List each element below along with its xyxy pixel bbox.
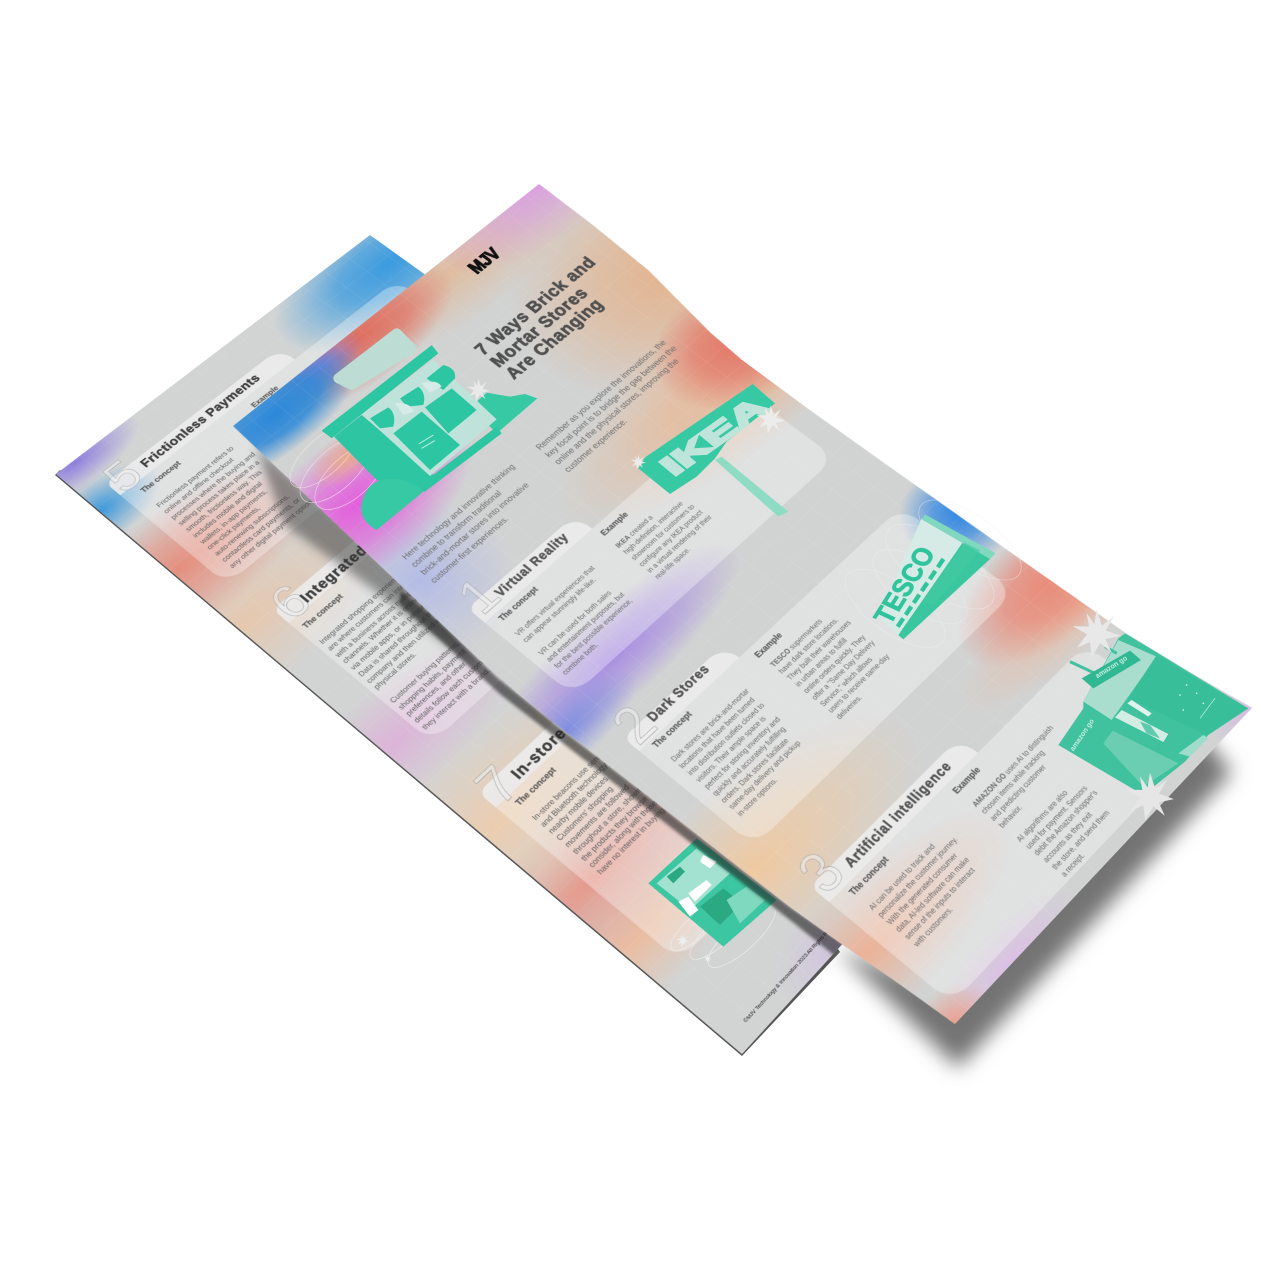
text: tesco example: have dark store locations. — [777, 616, 841, 676]
panel: frictionless payments: The concept — [139, 460, 183, 494]
panel: artificial intelligence: 3 — [784, 840, 857, 904]
text: dark stores concept: orders. Dark stores facilitate — [719, 737, 791, 805]
text: in-store concept: the products they browse or — [579, 788, 656, 863]
text: tesco example: users to receive same-day — [827, 653, 892, 715]
text: frictionless concept: wallets, in-app payments, — [199, 488, 269, 545]
text: integrated concept: physical stores. — [373, 651, 419, 691]
intro text left: combine to transform traditional — [409, 489, 504, 569]
intro text left: Here technology and innovative thinking — [400, 463, 517, 561]
text: dark stores concept: same-day delivery and pickup — [727, 740, 803, 812]
text: dark stores concept: into distribution outlets closed to — [686, 701, 767, 777]
panel: integrated shopping: 6 — [258, 575, 323, 629]
text: integrated concept: with a business across multiple — [334, 586, 418, 659]
panel: artificial intelligence: The concept — [847, 855, 891, 898]
panel: dark stores — [599, 514, 1006, 838]
text: integrated concept: Integrated shopping experiences — [318, 570, 407, 646]
panel: dark stores: 2 — [599, 695, 669, 755]
text: amazon example: AMAZON GO uses AI to distinguish — [971, 724, 1056, 809]
logo: MJV — [463, 245, 505, 277]
back sheet page — [56, 235, 1046, 1054]
heading: in-store beacons: In-store beacons — [508, 673, 625, 782]
text: amazon example: chosen items while tracking — [979, 749, 1047, 816]
text: dark stores concept: perfect for storing inventory and — [702, 715, 782, 791]
panel: in-store beacons — [462, 673, 756, 952]
text: tesco example: online orders quickly. They — [802, 634, 868, 695]
panel: frictionless payments — [92, 286, 408, 577]
intro text right: key focal point is to bridge the gap between the — [543, 344, 679, 459]
text: tesco example: Service," which allows — [818, 655, 875, 708]
text: vr concept: can appear stunningly life-like. — [521, 577, 598, 644]
text: integrated concept: are where customers can interact — [326, 575, 416, 652]
text: amazon example: and predicting customer — [988, 763, 1048, 823]
text: amazon example: behavior. — [997, 803, 1025, 830]
text: frictionless concept: smooth, frictionless way. This — [184, 469, 264, 533]
intro text left: brick-and-mortar stores into innovative — [419, 481, 531, 577]
panel: frictionless payments: 5 — [92, 451, 154, 501]
text: ikea example: IKEA created a — [614, 514, 655, 550]
photo: in-store beacons — [648, 838, 783, 976]
text: in-store concept: Customers' shopping — [555, 785, 615, 843]
heading: integrated shopping: Integrated Shopping — [297, 492, 431, 605]
text: frictionless concept: any other digital payment option. — [228, 498, 316, 570]
heading: virtual reality: Virtual Reality — [491, 530, 572, 599]
illustration: storefront — [280, 333, 537, 530]
text: integrated concept: Data is shared throughout the — [357, 607, 438, 678]
text: vr concept: VR can be used for both sales — [537, 589, 614, 657]
text: vr concept: and entertainment purposes, but — [545, 591, 626, 664]
text: frictionless concept: Frictionless payment refers to — [155, 445, 236, 509]
text: ai concept: with customers. — [912, 905, 955, 949]
text: tesco example: TESCO supermarkets — [769, 618, 825, 669]
illustration: Amazon Go store: amazon go — [1094, 654, 1130, 680]
text: frictionless concept: selling process takes place in a — [177, 460, 261, 527]
illustration: TESCO building: TESCO — [867, 542, 942, 628]
text: amazon example: AI algorithms are also — [1015, 789, 1070, 844]
text: integrated concept: shopping habits, payment — [397, 648, 468, 711]
text: vr concept: for the best possible experience, — [552, 597, 634, 670]
panel: in-store beacons: The concept — [514, 766, 558, 808]
text: ikea example: in a virtual rendering of their — [645, 514, 714, 574]
text: ikea example: high-definition, interactive — [622, 500, 685, 556]
text: ai concept: data, AI-led software can make — [894, 856, 972, 934]
text: integrated concept — [318, 570, 492, 731]
title: Are Changing — [500, 295, 608, 383]
text: tesco example: deliveries. — [835, 694, 865, 721]
text: tesco example — [769, 616, 892, 721]
text: frictionless concept: contactless card payments, or — [221, 497, 302, 564]
intro text right: online and the physical stores, improving the — [552, 357, 681, 466]
heading: frictionless payments: Frictionless Payments — [138, 372, 263, 470]
text: dark stores concept: in-store options. — [736, 777, 780, 818]
panel: virtual reality: The concept — [497, 585, 540, 623]
text: ai concept: personalize the customer journey. — [876, 835, 960, 920]
text: tesco example: They built their warehouses — [785, 619, 853, 682]
text: ikea example: configure any IKEA product — [637, 509, 705, 568]
text: frictionless concept: processes where the buying and — [170, 451, 257, 521]
text: dark stores concept: Dark stores are brick-and-mortar — [669, 687, 751, 764]
text: amazon example: the store, and send them — [1050, 809, 1112, 872]
text: dark stores concept: locations that have been turned — [677, 696, 757, 770]
text: in-store concept: nearby mobile devices. — [547, 774, 612, 836]
text: tesco example: in urban areas to fulfill — [793, 637, 849, 689]
text: integrated concept: they interact with a brand. — [421, 667, 492, 731]
text: frictionless concept: includes mobile and digital — [191, 481, 264, 539]
panel: dark stores: Example — [753, 631, 785, 660]
text: frictionless concept: online and offline checkout — [162, 457, 236, 515]
text: ai concept: With the generated consumer — [885, 852, 960, 927]
text: amazon example — [971, 724, 1112, 879]
text: amazon example: used for payment. Sensors — [1024, 784, 1090, 851]
text: ikea example — [614, 500, 714, 581]
panel: frictionless payments: Example — [250, 385, 281, 409]
back sheet artwork and cast shadows — [252, 447, 1242, 1077]
intro text right: customer experience. — [562, 417, 629, 474]
text: dark stores concept: visitors. Their ample space is — [694, 715, 768, 784]
text: integrated concept: preferences, and other — [405, 661, 468, 718]
text: amazon example: accounts as they exit — [1041, 811, 1095, 865]
text: ai concept — [867, 835, 977, 949]
text: integrated concept: details follow each customer — [413, 655, 490, 725]
text: dark stores concept — [669, 687, 803, 818]
text: ikea example: showroom for customers to — [629, 503, 697, 562]
text: vr concept: VR offers virtual experiences that — [513, 565, 597, 638]
text: in-store concept: have no interest in buying. — [596, 805, 669, 877]
text: vr concept — [513, 565, 634, 677]
panel: integrated shopping: The concept — [301, 593, 345, 630]
text: amazon example: debit the Amazon shopper's — [1033, 789, 1100, 858]
heading: artificial intelligence: Artificial intelligence — [840, 758, 955, 870]
intro text right: Remember as you explore the innovations, the — [534, 338, 668, 452]
text: integrated concept: channels. Whether it is online, — [341, 594, 423, 665]
illustration: IKEA sign — [631, 384, 788, 517]
intro text left: customer-first experiences. — [428, 515, 510, 585]
panel: artificial intelligence: Example — [951, 765, 983, 796]
text: in-store concept: throughout a store, showing — [571, 782, 648, 856]
text: ai concept: sense of the inputs to interact — [903, 866, 977, 941]
illustration: Amazon Go store — [1058, 609, 1248, 821]
cast shadow of front page onto back page — [255, 445, 860, 968]
front sheet page — [233, 184, 1252, 1024]
heading: dark stores: Dark Stores — [643, 661, 713, 724]
text: tesco example: offer a "Same Day Delivery — [810, 639, 877, 702]
text: in-store concept: consider, along with those they — [588, 788, 672, 870]
footer: ©MJV Technology & Innovation 2023 All Rights Reserved — [743, 917, 842, 1024]
cast shadow on table — [836, 720, 1232, 1068]
text: in-store concept: In-store beacons use sensors — [531, 745, 612, 822]
text: amazon example: a receipt. — [1059, 852, 1087, 879]
text: in-store concept: and Bluetooth technology to — [539, 756, 616, 829]
text: integrated concept: Customer buying patterns, — [389, 640, 462, 705]
panel: virtual reality: 1 — [445, 568, 512, 624]
text: ikea example: real-life space. — [653, 546, 692, 581]
text: in-store concept: movements are followed — [563, 783, 631, 849]
panel: virtual reality: Example — [599, 511, 630, 537]
text: vr concept: combine both. — [560, 641, 600, 677]
text: in-store concept — [531, 745, 672, 877]
illustration: IKEA sign: IKEA — [653, 391, 775, 481]
text: ai concept: AI can be used to track and — [867, 842, 937, 912]
panel: in-store beacons: 7 — [462, 755, 532, 815]
illustration: TESCO building — [833, 485, 1033, 662]
title: 7 Ways Brick and — [470, 253, 600, 359]
text: integrated concept: company and then utilized in — [365, 616, 443, 685]
panel: virtual reality — [445, 410, 826, 688]
text: frictionless concept — [155, 445, 316, 570]
panel: artificial intelligence — [784, 652, 1166, 994]
text: frictionless concept: one-click payments, — [206, 506, 262, 551]
title: Mortar Stores — [485, 283, 592, 371]
panel: integrated shopping — [258, 492, 501, 734]
text: dark stores concept: quickly and accurately fulfilling — [711, 725, 788, 798]
text: integrated concept: via mobile apps, or in person. — [349, 602, 430, 672]
panel: dark stores: The concept — [651, 710, 694, 750]
text: frictionless concept: auto-renewing subscriptions, — [213, 494, 292, 558]
illustration: Amazon Go store: amazon go — [1068, 716, 1096, 753]
